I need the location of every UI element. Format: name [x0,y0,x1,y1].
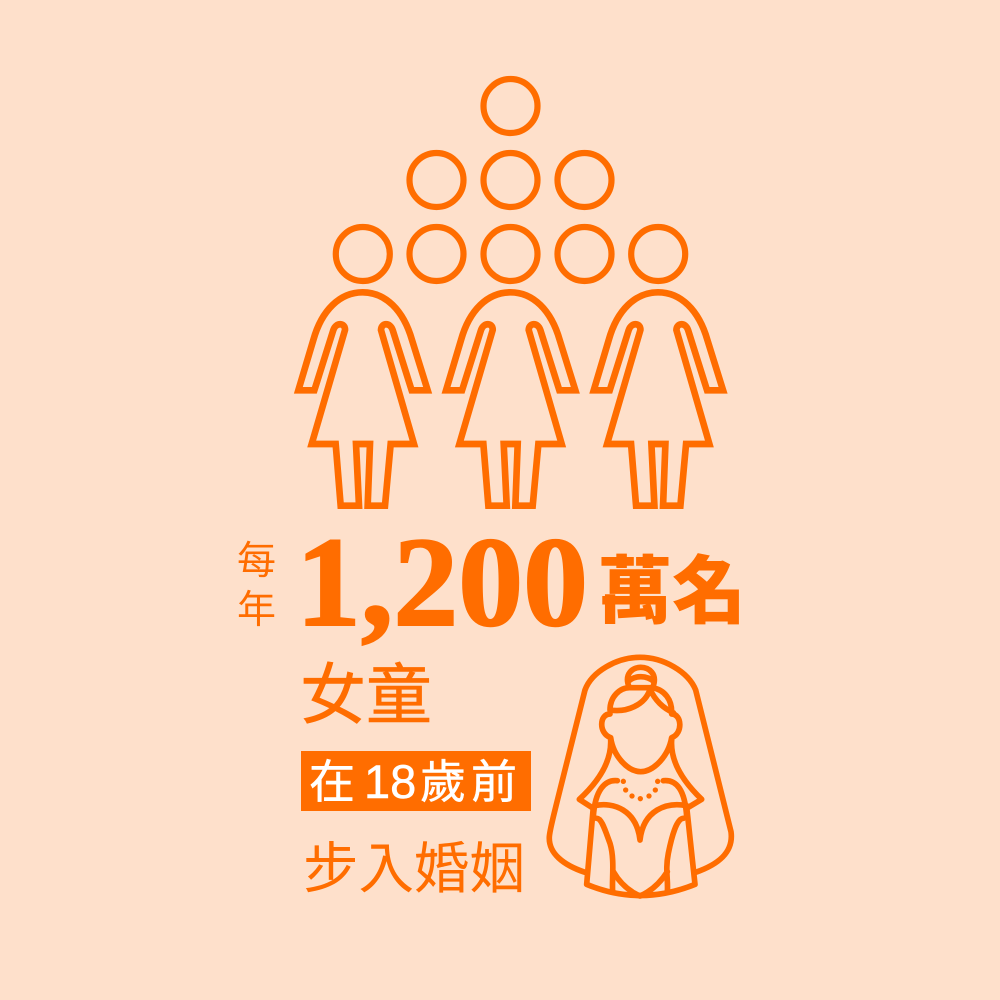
figure: left [298,292,428,506]
icon: bride with veil [549,657,731,896]
veil [549,657,731,872]
big number: 1,200: 1,200 [296,511,588,653]
label: 在18歲前: 18 [364,755,416,808]
skirt [613,872,667,896]
bodice [595,805,687,840]
figure: right [594,292,723,506]
pictogram: three female figures [298,292,723,506]
figure: middle [446,292,575,506]
collar [593,781,687,817]
hair bun [627,667,654,688]
text: 步入婚姻: 步入婚姻 [303,838,525,900]
label: 在18歲前: 歲 [420,756,466,808]
gown edges [587,807,695,895]
face [602,714,680,772]
hair [610,688,673,713]
label: 在18歲前: 前 [471,756,517,808]
necklace [621,779,660,801]
neck and shoulders [579,740,702,808]
text: 每年: 年 [237,589,276,632]
label: 在18歲前 [301,751,531,811]
pictogram: heads pyramid [336,79,685,281]
text: 萬名: 萬名 [598,550,746,633]
label: 在18歲前: 在 [309,756,355,808]
sleeves [597,818,683,892]
text: 女童: 女童 [300,658,432,732]
text: 每年: 每 [237,540,276,583]
text: 每年 [237,540,276,632]
